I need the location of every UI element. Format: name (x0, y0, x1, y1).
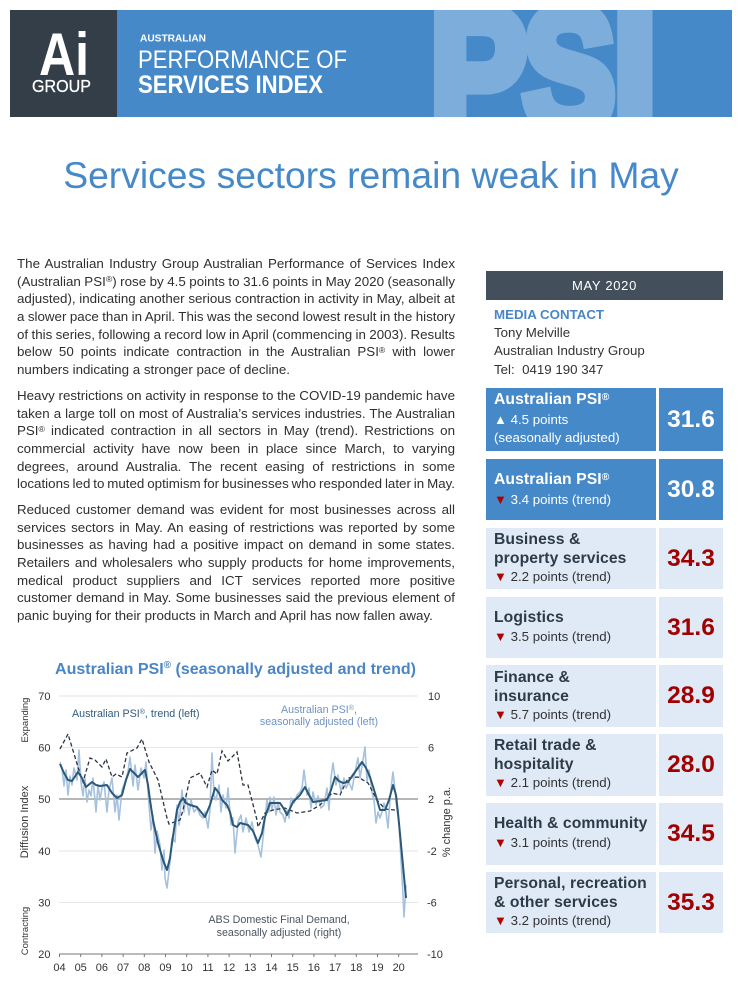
text block: demand paragraph (17, 502, 455, 623)
x axis: 16 (308, 962, 320, 974)
right y axis labels: 2 (428, 794, 434, 806)
panel: Personal, recreation and other services: ▼ 3.2 points (trend) (494, 913, 611, 928)
text block: demand paragraph: Reduced customer demand was evident for most businesses across all (17, 502, 455, 517)
left y axis labels: 50 (38, 794, 50, 806)
media contact: Australian Industry Group (494, 343, 645, 358)
rotated axis titles: Expanding (20, 698, 31, 742)
panel: Finance and insurance: Finance & (494, 669, 570, 686)
panel: Australian PSI seasonally adjusted: Australian PSI® (494, 391, 609, 408)
logo block: GROUP (32, 76, 91, 96)
panel: Finance and insurance (486, 665, 656, 727)
text block: demand paragraph: customer demand in May. Some businesses said the previous element of (17, 590, 455, 605)
x axis: 14 (265, 962, 278, 974)
x axis: 10 (181, 962, 193, 974)
domestic final demand dashed line (60, 734, 395, 827)
panel: Australian PSI seasonally adjusted: (seasonally adjusted) (494, 430, 620, 444)
panel: Health and community: ▼ 3.1 points (trend) (494, 834, 611, 850)
big PSI watermark (430, 0, 657, 168)
text block: restrictions paragraph: degrees, around Australia. The recent easing of restrictions in some (17, 459, 455, 474)
text block: intro paragraph: a slower pace than in April. This was the second lowest result in the history (17, 309, 455, 324)
text block: restrictions paragraph: commercial activity have now been in place since March, to varying (17, 441, 455, 456)
right y axis labels: -10 (427, 949, 443, 961)
text block: intro paragraph: adjusted), indicating another serious contraction in activity in May, albeit at (17, 291, 455, 306)
text block: intro paragraph: The Australian Industry Group Australian Performance of Services Index (17, 256, 455, 271)
rotated axis titles (19, 698, 453, 955)
banner titles (138, 34, 347, 99)
series label: seasonally adjusted: ® (349, 704, 355, 712)
value: 35.3 (659, 872, 723, 933)
x axis: 12 (223, 962, 235, 974)
media contact: MEDIA CONTACT (494, 307, 604, 322)
x axis: 09 (159, 962, 172, 974)
text block: restrictions paragraph: Heavy restrictions on activity in response to the COVID-19 pandemic have (17, 388, 455, 403)
series label: trend: ® (140, 708, 146, 716)
banner background (10, 10, 732, 117)
chart title: (seasonally adjusted and trend) (171, 661, 416, 678)
value: 28.9 (659, 665, 723, 727)
banner titles: SERVICES INDEX (138, 71, 323, 99)
panel: Retail trade and hospitality (486, 734, 656, 796)
x axis: 07 (117, 962, 129, 974)
value: 35.3: 35.3 (667, 888, 715, 916)
x axis: 13 (244, 962, 256, 974)
panel: Finance and insurance: ▼ 5.7 points (trend) (494, 707, 611, 722)
left y axis labels: 40 (38, 846, 50, 858)
right y axis labels: 10 (428, 691, 440, 703)
panel: Australian PSI trend (486, 459, 656, 520)
series label: ABS demand: ABS Domestic Final Demand, (208, 914, 350, 926)
x axis (53, 954, 418, 974)
x axis: 11 (202, 962, 214, 974)
text block: demand paragraph: panic buying for their products in March and April has now fallen away. (17, 608, 433, 623)
right y axis labels: -6 (427, 898, 437, 910)
banner titles: AUSTRALIAN (140, 34, 206, 44)
x axis: 04 (53, 962, 66, 974)
series label: seasonally adjusted: seasonally adjusted (left) (260, 716, 378, 728)
text block: demand paragraph: services sectors in May. An easing of restrictions was reported by some (17, 520, 455, 535)
media contact (494, 307, 645, 377)
text block: demand paragraph: Retailers and wholesalers who supply products for home improvements, (17, 555, 455, 570)
value: 31.6: 31.6 (667, 406, 715, 432)
rotated axis titles: Contracting (20, 907, 31, 955)
text block: demand paragraph: businesses as having had a positive impact on demand in some states. (17, 537, 455, 552)
panel: Personal, recreation and other services (486, 872, 656, 933)
text block: intro paragraph: numbers indicating a stronger pace of decline. (17, 362, 290, 377)
left y axis labels: 30 (38, 898, 50, 910)
panel: Logistics: ▼ 3.5 points (trend) (494, 628, 611, 644)
value: 34.5: 34.5 (667, 820, 715, 847)
series label: seasonally adjusted: Australian PSI (281, 704, 357, 716)
media contact: Tony Melville (494, 325, 570, 340)
text block: demand paragraph: medical product suppliers and ICT services reported more positive (17, 573, 455, 588)
left y axis labels: 70 (38, 691, 50, 703)
gridlines (59, 696, 418, 902)
panel: Finance and insurance: insurance (494, 688, 569, 704)
chart: Australian PSI seasonally adjusted and trend (19, 660, 453, 974)
logo block (10, 10, 117, 117)
left y axis labels (38, 691, 50, 961)
x axis: 20 (393, 962, 405, 974)
logo block: Ai (39, 21, 89, 88)
value: 34.3 (659, 528, 723, 589)
chart title: ® (164, 660, 172, 671)
header banner (10, 10, 732, 117)
panel: Health and community: Health & community (494, 815, 647, 832)
x axis: 15 (287, 962, 299, 974)
panel: Business and property services: ▼ 2.2 points (trend) (494, 569, 611, 584)
panel: Logistics (486, 597, 656, 658)
month banner (486, 271, 723, 300)
right y axis labels: -2 (427, 846, 437, 858)
text block: restrictions paragraph: locations led to muted optimism for businesses who responded later in May. (17, 476, 455, 491)
panel: Health and community (486, 803, 656, 865)
PSI trend line (60, 762, 406, 898)
rotated axis titles: Diffusion Index (19, 785, 31, 858)
panel: Australian PSI seasonally adjusted (486, 388, 656, 451)
panel: Retail trade and hospitality: hospitality (494, 756, 574, 772)
series label: trend: , trend (left) (145, 708, 200, 720)
chart title: Australian PSI (55, 661, 163, 678)
right y axis labels: 6 (428, 742, 434, 754)
text block: restrictions paragraph: taken a large toll on most of Australia’s services industries. The Australian (17, 406, 455, 421)
panel: Logistics: Logistics (494, 609, 564, 626)
value: 31.6 (659, 388, 723, 451)
left y axis labels: 20 (38, 949, 50, 961)
value: 34.3: 34.3 (667, 544, 715, 572)
panel: Retail trade and hospitality: Retail trade & (494, 737, 597, 754)
panel: Personal, recreation and other services: & other services (494, 894, 618, 910)
x axis: 19 (371, 962, 384, 974)
series label: ABS demand: seasonally adjusted (right) (217, 927, 341, 939)
panel: Australian PSI trend: ▼ 3.4 points (trend) (494, 492, 611, 506)
x axis: 18 (350, 962, 362, 974)
x axis: 06 (96, 962, 108, 974)
x axis: 05 (75, 962, 87, 974)
value: 28.0: 28.0 (667, 751, 715, 778)
series label: trend: Australian PSI (72, 708, 140, 720)
panel: Business and property services (486, 528, 656, 589)
text block: intro paragraph (17, 256, 455, 377)
text block: intro paragraph: below 50 points indicate contraction in the Australian PSI® with lower (17, 344, 455, 359)
panel: Business and property services: property services (494, 550, 627, 566)
value: 31.6 (659, 597, 723, 658)
panel: Retail trade and hospitality: ▼ 2.1 points (trend) (494, 775, 611, 790)
value: 28.9: 28.9 (667, 682, 715, 709)
x axis: 17 (329, 962, 341, 974)
left y axis labels: 60 (38, 742, 50, 754)
rotated axis titles: % change p.a. (441, 787, 453, 857)
month banner: MAY 2020 (572, 278, 637, 293)
value: 30.8: 30.8 (667, 476, 715, 502)
value: 34.5 (659, 803, 723, 865)
text block: intro paragraph: of this series, following a record low in April (commencing in 2003). Results (17, 327, 455, 342)
seasonally adjusted line (60, 747, 406, 917)
text block: intro paragraph: (Australian PSI®) rose by 4.5 points to 31.6 points in May 2020 (seasonally (17, 274, 455, 289)
panel: Business and property services: Business & (494, 531, 580, 548)
value: 30.8 (659, 459, 723, 520)
media contact: Tel: 0419 190 347 (494, 362, 603, 377)
panel: Australian PSI seasonally adjusted: ▲ 4.5 points (494, 412, 568, 426)
value: 31.6: 31.6 (667, 614, 715, 640)
series label: seasonally adjusted: , (354, 704, 357, 716)
panel: Australian PSI trend: Australian PSI® (494, 471, 609, 488)
right y axis labels (427, 691, 443, 961)
value: 28.0 (659, 734, 723, 796)
text block: restrictions paragraph: PSI® indicated contraction in all sectors in May (trend). Restrictions on (17, 423, 455, 438)
text block: restrictions paragraph (17, 388, 455, 491)
main title: Services sectors remain weak in May (63, 154, 679, 196)
banner titles: PERFORMANCE OF (138, 46, 347, 74)
x axis: 08 (138, 962, 150, 974)
panel: Personal, recreation and other services: Personal, recreation (494, 875, 647, 892)
